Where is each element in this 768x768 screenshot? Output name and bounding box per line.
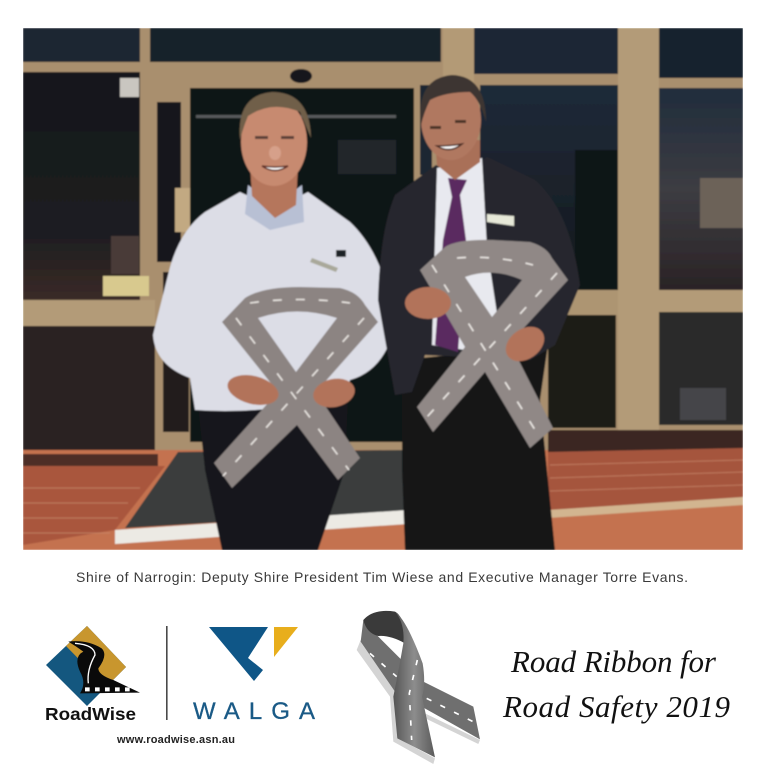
left man's hands — [226, 374, 356, 409]
right road ribbon — [417, 240, 568, 448]
shirt — [153, 192, 395, 411]
title: Road Ribbon for Road Safety 2019: Road Safety 2019 — [502, 689, 730, 724]
WALGA logo — [193, 627, 315, 725]
back strand — [361, 620, 480, 739]
logo divider — [166, 626, 168, 720]
face features — [255, 136, 294, 170]
right man's hands — [405, 287, 551, 368]
website address: www.roadwise.asn.au — [116, 734, 235, 746]
suit jacket — [378, 157, 580, 395]
head — [420, 92, 482, 154]
title: Road Ribbon for Road Safety 2019: Road Ribbon for — [510, 644, 717, 679]
front strand — [393, 612, 435, 757]
title: Road Ribbon for Road Safety 2019 — [502, 644, 730, 724]
man on the left in white shirt — [153, 92, 395, 550]
name badge — [487, 214, 514, 226]
building facade — [23, 28, 743, 454]
left road ribbon — [214, 287, 378, 488]
hair — [240, 92, 311, 140]
head — [241, 98, 307, 186]
RoadWise logo — [45, 626, 140, 724]
loop inside — [363, 611, 405, 643]
man on the right in dark suit — [378, 75, 580, 550]
icon: gold triangle — [274, 627, 298, 657]
hair — [420, 75, 486, 125]
tie — [435, 178, 467, 352]
icon: blue triangle — [209, 627, 268, 681]
ground: brick paving, mat and kerb — [23, 430, 743, 550]
RoadWise wordmark: RoadWise — [45, 704, 136, 724]
neck — [250, 165, 298, 218]
trousers — [198, 395, 348, 550]
icon: grey road ribbon — [357, 611, 480, 764]
icon: diamond with road — [46, 626, 140, 706]
trousers — [402, 345, 555, 550]
WALGA wordmark: WALGA — [193, 698, 315, 725]
photo caption: Shire of Narrogin: Deputy Shire President Tim Wiese and Executive Manager Torre Evans. — [76, 569, 688, 585]
ribbon shadow — [357, 640, 480, 764]
neck — [435, 140, 480, 180]
collar — [245, 185, 304, 230]
name badge — [310, 258, 338, 272]
face features — [430, 120, 466, 150]
photo: two men holding road ribbons — [23, 28, 743, 550]
shirt front — [432, 158, 498, 350]
lane markings — [370, 653, 475, 740]
